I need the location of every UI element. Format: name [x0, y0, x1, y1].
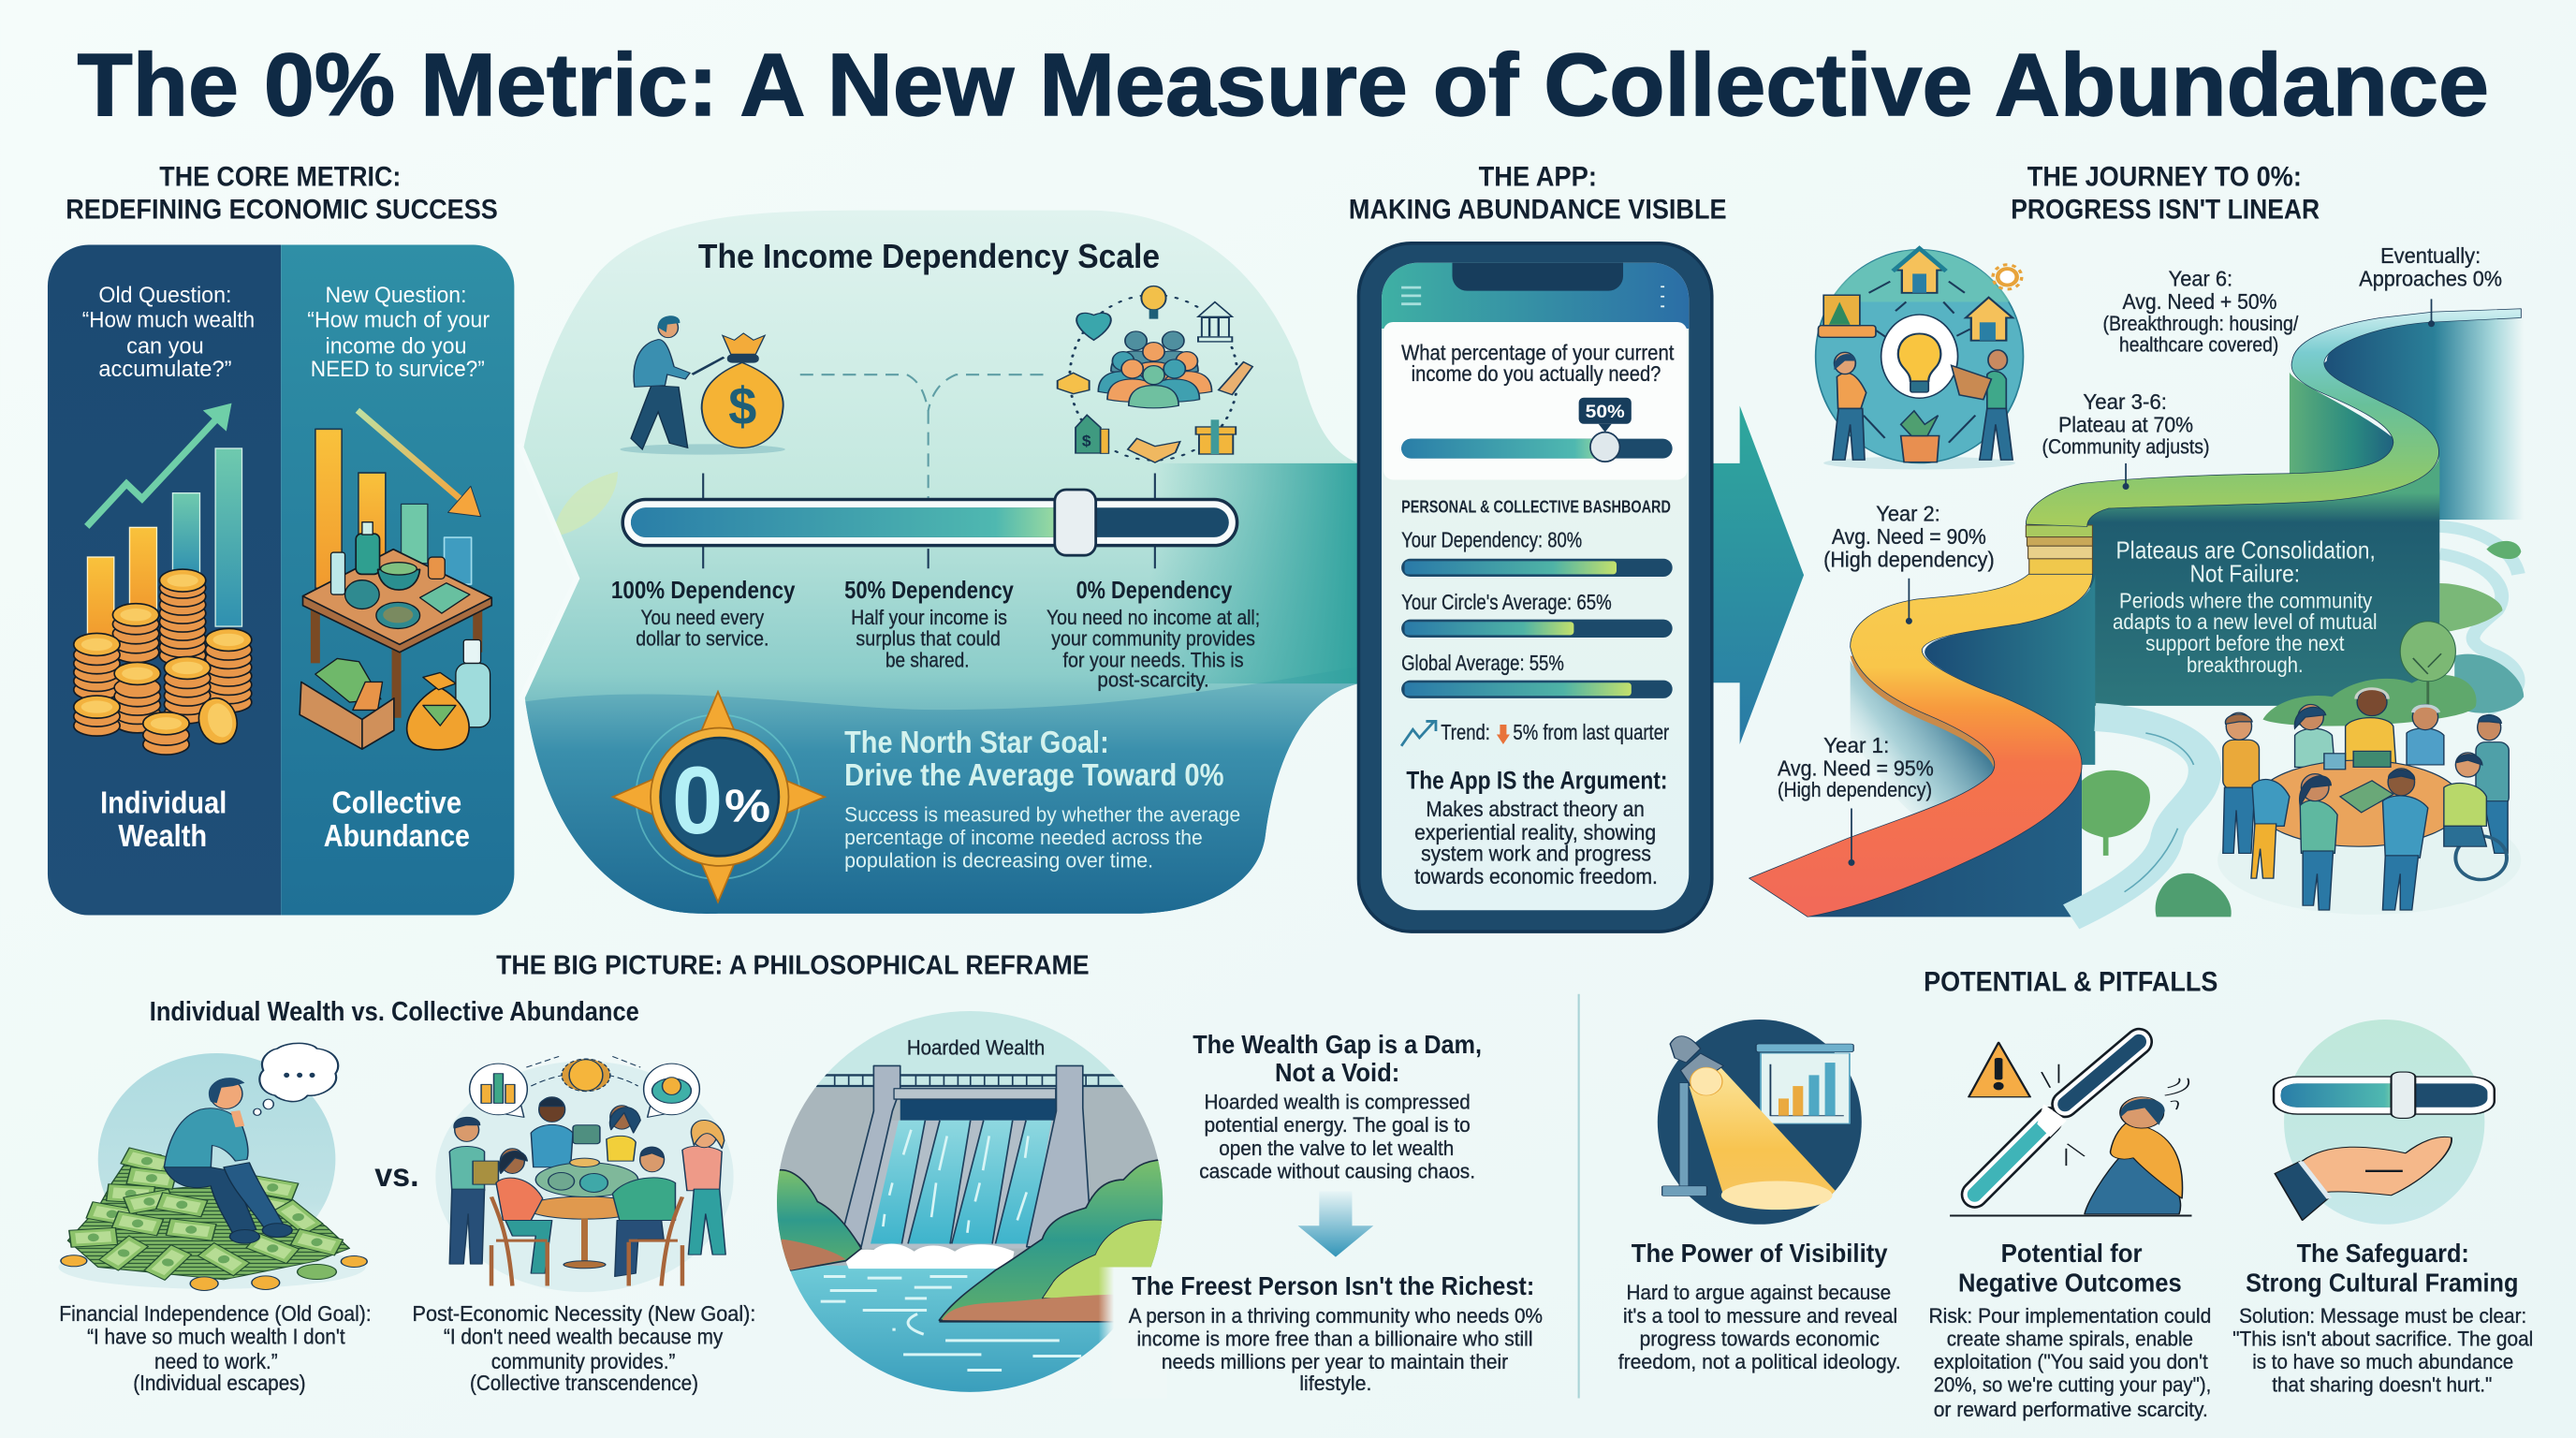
text: north star goal: population is decreasing over time. [844, 849, 1153, 873]
text: north star goal [844, 726, 1240, 873]
panel: income dependency scale [493, 211, 1804, 920]
label: individual wealth: Individual [100, 786, 227, 821]
phone mockup [1358, 243, 1712, 932]
text: north star goal: Drive the Average Toward 0% [844, 758, 1224, 793]
label: individual wealth: Wealth [118, 819, 207, 854]
heading: the app [1349, 161, 1727, 225]
road stripes [2026, 525, 2092, 574]
text: the safeguard: Solution: Message must be clear: [2239, 1304, 2526, 1328]
scale point: 50 percent dependency [844, 578, 1015, 672]
phone body [1358, 243, 1712, 932]
scale point: 50 percent dependency: Half your income is [851, 606, 1007, 629]
text: power of visibility: progress towards economic [1640, 1327, 1880, 1350]
wall under yellow road [1925, 574, 2095, 765]
heading: journey [2011, 161, 2320, 225]
trend line: Trend: [1441, 720, 1490, 744]
text: the app is the argument: towards economic freedom. [1414, 864, 1658, 888]
scale point: 0 percent dependency: your community provides [1051, 627, 1255, 651]
text: the freest person [1129, 1271, 1543, 1395]
bushes and tree behind community [2262, 675, 2477, 726]
illustration: man on money pile [58, 1043, 367, 1290]
caption: financial independence: “I have so much wealth I don't [87, 1325, 345, 1349]
chart: falling bars with arrow and table of goods [300, 410, 491, 750]
text: potential for negative outcomes: exploitation ("You said you don't [1934, 1350, 2208, 1373]
upper cliff [2324, 317, 2524, 520]
label: collective abundance: Abundance [324, 819, 470, 854]
text: the app is the argument: experiential reality, showing [1414, 820, 1656, 844]
label: collective abundance: Collective [332, 786, 461, 821]
text: potential for negative outcomes: Risk: Pour implementation could [1928, 1304, 2211, 1328]
scale point: 50 percent dependency: surplus that could [856, 627, 1001, 651]
arrow: flow into the app [1298, 405, 1804, 744]
dashboard: personal and collective [1401, 497, 1673, 746]
text: old question: can you [126, 334, 204, 359]
heading: journey: PROGRESS ISN'T LINEAR [2011, 194, 2320, 225]
text: new question [307, 284, 490, 382]
text: power of visibility: Hard to argue against because [1627, 1281, 1891, 1304]
arrow: downward [1298, 1191, 1373, 1257]
text: power of visibility: freedom, not a political ideology. [1618, 1350, 1901, 1373]
text: new question: “How much of your [307, 308, 490, 332]
heading: big picture: THE BIG PICTURE: A PHILOSOPHICAL REFRAME [496, 951, 1090, 981]
chart: rising bars with arrow and coin stacks [74, 404, 252, 755]
text: power of visibility [1618, 1239, 1901, 1373]
label: year 2: Avg. Need = 90% [1832, 524, 1986, 549]
caption: financial independence [59, 1301, 372, 1395]
caption: financial independence: (Individual escapes) [133, 1371, 305, 1395]
slider: app at 50 percent: 50% [1586, 403, 1625, 422]
bar: your circle's average: Your Circle's Average: 65% [1401, 590, 1612, 614]
label: year 6: healthcare covered) [2119, 333, 2278, 357]
text: the freest person: income is more free than a billionaire who still [1137, 1327, 1532, 1350]
text: the app is the argument: Makes abstract theory an [1426, 797, 1645, 821]
label: year 3-6: Year 3-6: [2083, 389, 2167, 414]
scale point: 0 percent dependency: 0% Dependency [1076, 578, 1233, 604]
label: year 2: Year 2: [1876, 501, 1940, 525]
caption: post-economic necessity: (Collective transcendence) [470, 1371, 698, 1395]
heading: the app: THE APP: [1479, 161, 1597, 192]
text: the wealth gap is a dam: The Wealth Gap is a Dam, [1193, 1030, 1482, 1059]
label: year 1: (High dependency) [1778, 778, 1932, 801]
scale point: 0 percent dependency: for your needs. This is [1063, 649, 1244, 672]
heading: potential and pitfalls: POTENTIAL & PITFALLS [1924, 966, 2217, 997]
trend line: 5% from last quarter [1513, 720, 1669, 744]
text: the wealth gap is a dam: potential energy. The goal is to [1204, 1113, 1471, 1137]
label: year 6: Year 6: [2169, 266, 2232, 290]
illustration: community hub [1816, 248, 2024, 469]
icon: community resources circle [1058, 286, 1252, 462]
plateau panel [2087, 456, 2439, 706]
bar: global average [1401, 651, 1673, 698]
panel: old versus new question [48, 244, 514, 916]
text: north star goal: The North Star Goal: [844, 726, 1109, 760]
text: the freest person: lifestyle. [1299, 1372, 1372, 1395]
trend line [1401, 720, 1669, 746]
icon: north star compass: % [724, 782, 770, 832]
text: the wealth gap is a dam: Not a Void: [1275, 1058, 1399, 1087]
text: new question: income do you [326, 334, 466, 359]
label: eventually: Eventually: [2380, 243, 2481, 268]
text: plateaus: support before the next [2145, 631, 2345, 655]
bar: global average: Global Average: 55% [1401, 651, 1564, 675]
text: power of visibility: it's a tool to messure and reveal [1623, 1304, 1897, 1328]
caption: financial independence: need to work.” [154, 1349, 278, 1373]
label: year 2 [1823, 501, 1995, 624]
text: the wealth gap is a dam: Hoarded wealth is compressed [1204, 1091, 1471, 1114]
bar: your dependency: Your Dependency: 80% [1401, 527, 1582, 551]
text: potential for negative outcomes [1928, 1239, 2211, 1421]
scale point: 100 percent dependency: 100% Dependency [611, 578, 796, 604]
section: potential and pitfalls [1618, 966, 2533, 1421]
text: north star goal: Success is measured by whether the average [844, 803, 1240, 827]
label: year 6 [2102, 266, 2299, 357]
road upper section [2026, 309, 2521, 526]
lower-left cove [1851, 660, 1998, 819]
text: app question [1401, 340, 1675, 386]
text: the freest person: The Freest Person Isn't the Richest: [1132, 1271, 1534, 1300]
icon: lamp spotlight on chart [1658, 1020, 1862, 1225]
text: the wealth gap is a dam: open the valve to let wealth [1219, 1137, 1454, 1160]
text: app question: income do you actually need? [1412, 361, 1661, 386]
heading: core metric [66, 161, 498, 225]
illustration: community around table [2217, 688, 2521, 915]
panel background: individual wealth [48, 244, 281, 916]
bar: your circle's average [1401, 590, 1673, 638]
text: the wealth gap is a dam [1193, 1030, 1482, 1182]
caption: post-economic necessity: Post-Economic Necessity (New Goal): [413, 1301, 755, 1326]
text: new question: NEED to survice?” [311, 358, 485, 382]
label: eventually: Approaches 0% [2359, 266, 2502, 290]
scale point: 0 percent dependency [1046, 578, 1260, 692]
heading: core metric: REDEFINING ECONOMIC SUCCESS [66, 194, 498, 225]
text: plateaus: Not Failure: [2190, 561, 2300, 587]
text: north star goal: percentage of income needed across the [844, 826, 1203, 849]
text: potential for negative outcomes: create shame spirals, enable [1947, 1327, 2193, 1350]
text: potential for negative outcomes: or reward performative scarcity. [1934, 1398, 2208, 1421]
label: year 6: (Breakthrough: housing/ [2102, 312, 2299, 335]
label: year 6: Avg. Need + 50% [2123, 289, 2277, 314]
text: power of visibility: The Power of Visibility [1632, 1239, 1888, 1268]
scale point: 50 percent dependency: be shared. [886, 649, 970, 672]
river foreground [2071, 717, 2204, 917]
wave: lower panel band [493, 463, 1364, 920]
inner green cliff [2290, 373, 2393, 483]
phone screen [1382, 263, 1689, 910]
label: collective abundance [324, 786, 470, 854]
label: eventually [2359, 243, 2502, 327]
text: the app is the argument [1406, 765, 1667, 888]
label: vs: vs. [374, 1157, 419, 1194]
label: hoarded wealth: Hoarded Wealth [907, 1036, 1045, 1060]
section: the core metric [48, 161, 514, 916]
section: the big picture [58, 951, 1543, 1399]
illustration: winding road to 0% [1749, 309, 2524, 917]
title: The 0% Metric: A New Measure of Collective Abundance [78, 36, 2489, 135]
text: the safeguard: is to have so much abundance [2252, 1350, 2513, 1373]
caption: post-economic necessity [413, 1301, 755, 1395]
text: the freest person: A person in a thriving community who needs 0% [1129, 1304, 1543, 1328]
icon: person pulling money bag: $ [728, 376, 756, 435]
label: year 1 [1778, 733, 1934, 866]
panel background: collective abundance [281, 244, 514, 916]
icon: slider held in open hand [2274, 1020, 2495, 1225]
text: potential for negative outcomes: 20%, so we're cutting your pay"), [1934, 1373, 2211, 1397]
illustration: dam releasing water [774, 1008, 1167, 1399]
dashboard: personal and collective: PERSONAL & COLLECTIVE BASHBOARD [1401, 497, 1671, 517]
text: plateaus: breakthrough. [2187, 653, 2304, 677]
label: year 3-6 [2042, 389, 2210, 490]
text: the app is the argument: system work and progress [1421, 842, 1651, 866]
label: year 1: Avg. Need = 95% [1778, 756, 1934, 780]
subheading: individual versus collective: Individual Wealth vs. Collective Abundance [150, 997, 639, 1027]
icon: north star compass: 0 [672, 747, 723, 854]
heading: income dependency scale: The Income Dependency Scale [698, 237, 1160, 275]
connector: dashed lines [800, 374, 1044, 501]
text: the safeguard [2232, 1239, 2533, 1397]
scale point: 0 percent dependency: post-scarcity. [1097, 668, 1209, 692]
bar: your dependency [1401, 527, 1673, 577]
scale point: 0 percent dependency: You need no income at all; [1046, 606, 1260, 629]
section: the journey to 0% [1749, 161, 2524, 917]
icon: warning and broken slider [1950, 1042, 2191, 1215]
bushes left of river [2082, 770, 2150, 856]
text: the app is the argument: The App IS the Argument: [1406, 765, 1667, 794]
background river and hills [2439, 526, 2518, 711]
label: individual wealth [100, 786, 227, 854]
text: potential for negative outcomes: Negative Outcomes [1958, 1268, 2182, 1297]
caption: financial independence: Financial Independence (Old Goal): [59, 1301, 372, 1326]
text: plateaus: Plateaus are Consolidation, [2116, 538, 2376, 565]
text: app question: What percentage of your current [1401, 340, 1675, 364]
panel background [522, 211, 1358, 914]
road lower section [1749, 574, 2092, 917]
text: plateaus: Periods where the community [2119, 588, 2373, 612]
slider: app at 50 percent [1401, 398, 1673, 462]
text: old question: “How much wealth [82, 308, 255, 332]
heading: journey: THE JOURNEY TO 0%: [2027, 161, 2302, 192]
text: the wealth gap is a dam: cascade without causing chaos. [1199, 1159, 1475, 1182]
slider: income dependency [622, 473, 1237, 568]
icon: community resources circle: $ [1082, 433, 1091, 450]
text: the freest person: needs millions per year to maintain their [1162, 1350, 1508, 1373]
text: old question [82, 284, 255, 382]
heading: the app: MAKING ABUNDANCE VISIBLE [1349, 194, 1727, 225]
label: year 2: (High dependency) [1823, 547, 1995, 571]
icon: north star compass [613, 692, 825, 902]
scale point: 100 percent dependency [611, 578, 796, 651]
text: old question: accumulate?” [98, 358, 232, 382]
text: plateaus [2113, 538, 2378, 677]
text: potential for negative outcomes: Potential for [2001, 1239, 2143, 1268]
label: year 3-6: Plateau at 70% [2058, 413, 2193, 437]
text: old question: Old Question: [98, 284, 232, 308]
heading: core metric: THE CORE METRIC: [159, 161, 401, 192]
text: plateaus: adapts to a new level of mutual [2113, 609, 2378, 634]
text: the safeguard: The Safeguard: [2297, 1239, 2469, 1268]
wall under red road [1808, 765, 2082, 917]
caption: post-economic necessity: community provides.” [491, 1349, 675, 1373]
label: year 3-6: (Community adjusts) [2042, 434, 2210, 458]
illustration: group sharing at table [435, 1056, 734, 1292]
section: the app [1349, 161, 1727, 932]
icon: person pulling money bag [620, 315, 785, 455]
text: the safeguard: Strong Cultural Framing [2246, 1268, 2519, 1297]
scale point: 100 percent dependency: dollar to service. [636, 627, 768, 651]
label: year 1: Year 1: [1823, 733, 1889, 757]
scale point: 50 percent dependency: 50% Dependency [844, 578, 1015, 604]
scale point: 100 percent dependency: You need every [641, 606, 765, 629]
caption: post-economic necessity: “I don't need wealth because my [444, 1325, 724, 1349]
road edge shadow [1851, 656, 2082, 781]
text: the safeguard: "This isn't about sacrifice. The goal [2232, 1327, 2533, 1350]
text: new question: New Question: [326, 284, 466, 308]
text: the safeguard: that sharing doesn't hurt." [2272, 1373, 2492, 1397]
